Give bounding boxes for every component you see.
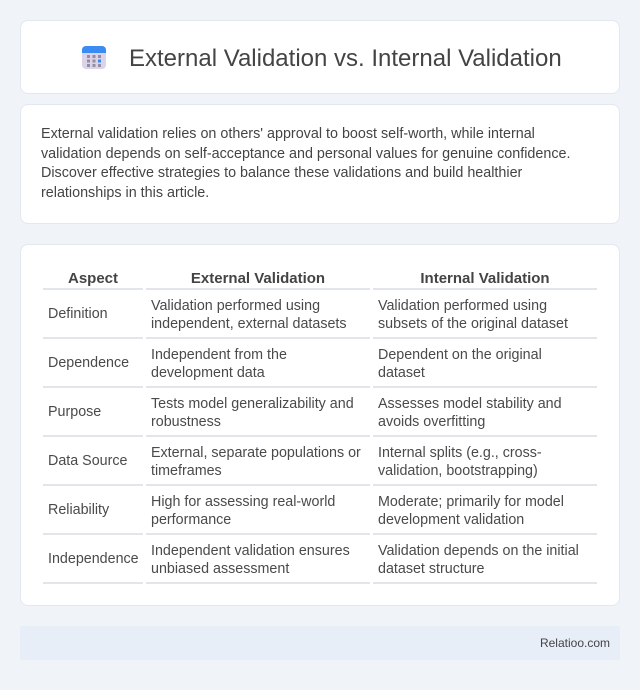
icon: calendar (82, 46, 106, 69)
row: Dependence: development data (151, 365, 265, 381)
row: Dependence: Independent from the (151, 347, 287, 363)
row: Reliability: Reliability (48, 502, 109, 518)
title: External Validation vs. Internal Validation (129, 45, 562, 72)
row: Dependence: Dependence (48, 355, 129, 371)
row: Purpose: Tests model generalizability and (151, 396, 354, 412)
panel: title header (20, 20, 620, 94)
footer credit: Relatioo.com (540, 636, 610, 650)
row: Definition: Validation performed using (378, 298, 547, 314)
row: Definition: Validation performed using (151, 298, 320, 314)
row: Data Source: External, separate populations or (151, 445, 361, 461)
column header: Internal Validation: Internal Validation (420, 270, 550, 287)
row: Independence: Validation depends on the initial (378, 543, 579, 559)
panel: introduction (20, 104, 620, 224)
row: Reliability: performance (151, 512, 231, 528)
row: Definition: subsets of the original dataset (378, 316, 568, 332)
row: Definition: Definition (48, 306, 108, 322)
row: Data Source: Internal splits (e.g., cross- (378, 445, 542, 461)
row: Dependence (48, 347, 542, 381)
row: Independence: unbiased assessment (151, 561, 289, 577)
intro text: relationships in this article. (41, 185, 209, 201)
row: Data Source: Data Source (48, 453, 127, 469)
intro text: Discover effective strategies to balance these validations and build healthier (41, 165, 522, 181)
row: Dependence: Dependent on the original (378, 347, 542, 363)
row: Data Source: timeframes (151, 463, 222, 479)
intro text: validation depends on self-acceptance and personal values for genuine confidence. (41, 146, 570, 162)
row: Independence: Independence (48, 551, 139, 567)
row: Purpose: robustness (151, 414, 221, 430)
row: Reliability (48, 494, 564, 528)
intro text: External validation relies on others' approval to boost self-worth, while internal (41, 126, 535, 142)
row: Independence: dataset structure (378, 561, 484, 577)
row: Independence (48, 543, 579, 577)
column header: Aspect: Aspect (68, 270, 118, 287)
panel: comparison table card (20, 244, 620, 606)
row: Reliability: Moderate; primarily for model (378, 494, 564, 510)
row: Data Source: validation, bootstrapping) (378, 463, 538, 479)
row: Definition: independent, external datasets (151, 316, 347, 332)
row: Purpose (48, 396, 562, 430)
row: Data Source (48, 445, 542, 479)
row: Reliability: High for assessing real-world (151, 494, 335, 510)
row: Purpose: Purpose (48, 404, 101, 420)
row: Definition (48, 298, 568, 332)
footer bar (20, 626, 620, 660)
row: Independence: Independent validation ensures (151, 543, 350, 559)
row: Dependence: dataset (378, 365, 425, 381)
intro text (41, 126, 570, 201)
row: Purpose: Assesses model stability and (378, 396, 562, 412)
row: Reliability: development validation (378, 512, 524, 528)
row: Purpose: avoids overfitting (378, 414, 485, 430)
column header: External Validation: External Validation (191, 270, 325, 287)
